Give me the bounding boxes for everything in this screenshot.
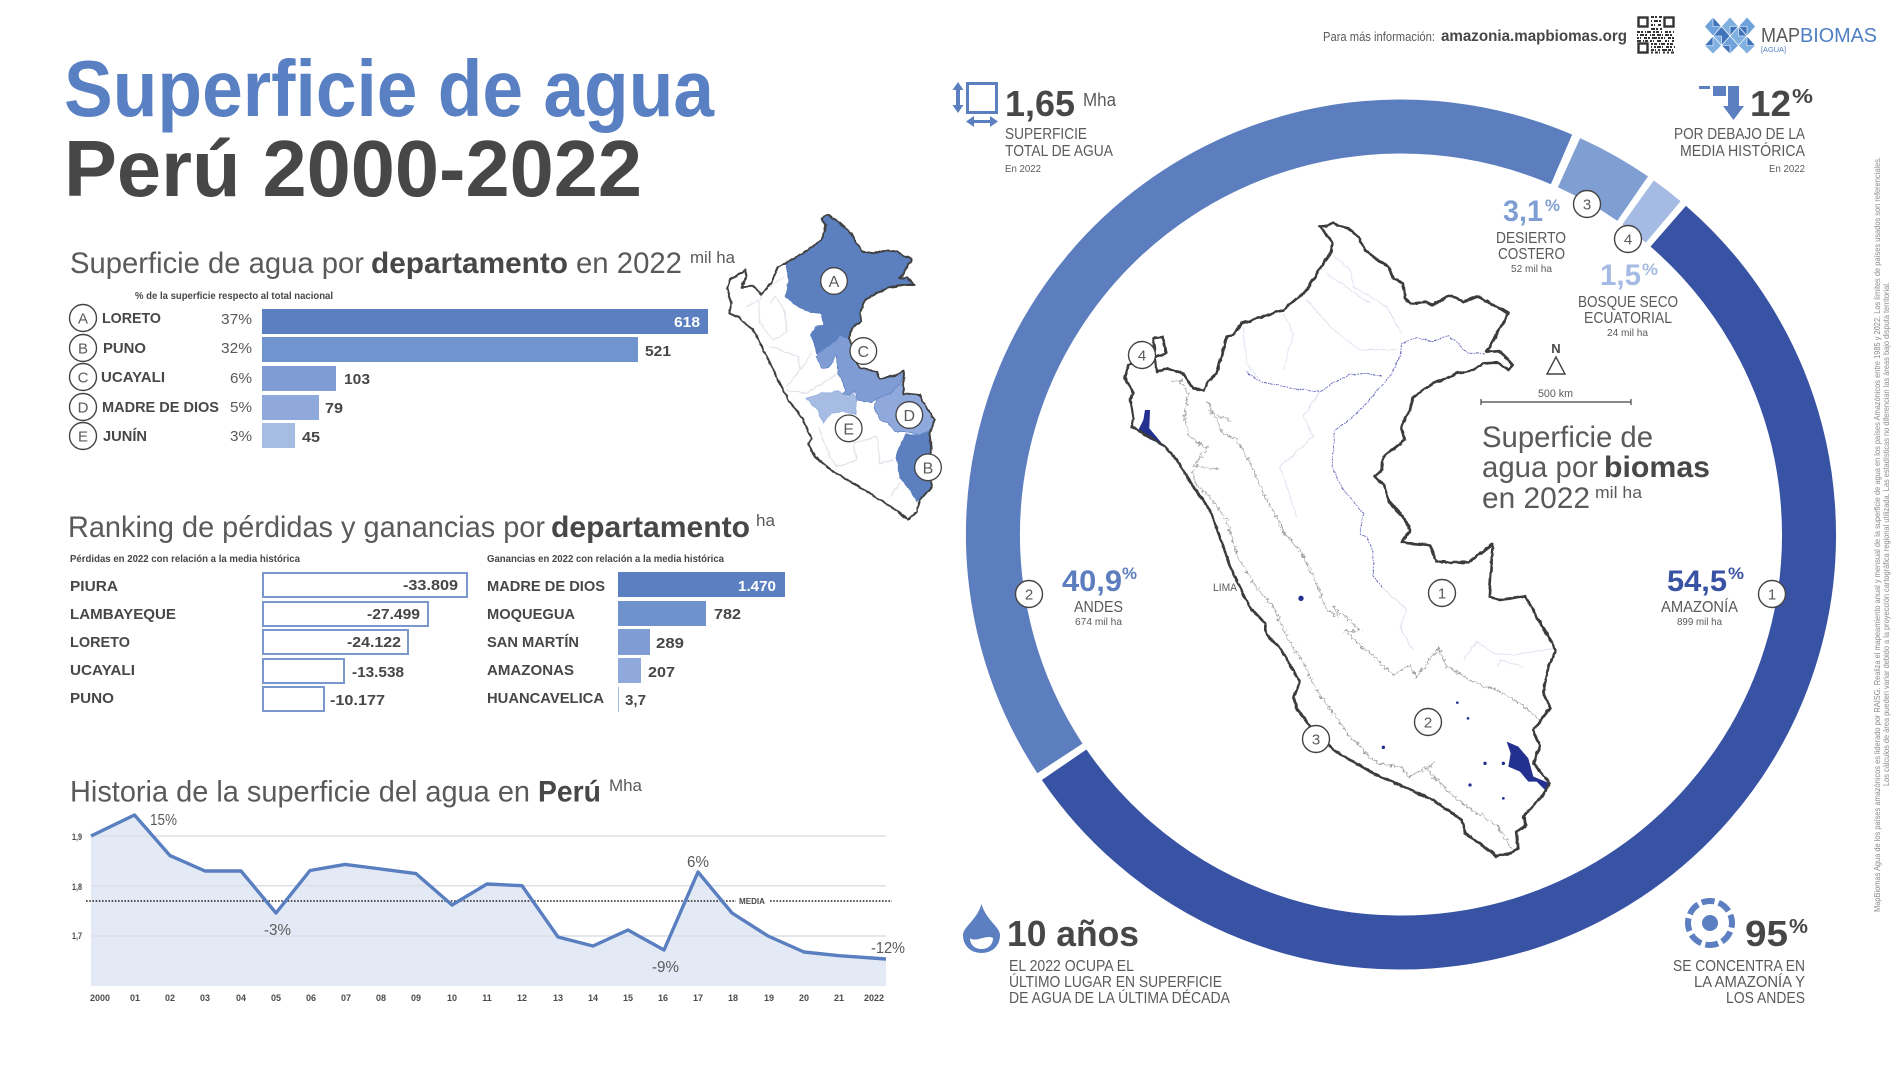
heading: historia: Historia de la superficie del agua en [70,776,530,808]
scale bar: 500 km [1538,388,1573,400]
map marker 3: 3 [1312,732,1320,748]
stat: Amazonía: 1 [1768,586,1776,604]
bars: pérdidas: -27.499 [367,606,420,623]
row: Madre de Dios: 79 [325,400,343,417]
area chart: 04 [236,993,246,1003]
stat: desierto costero: DESIERTO [1496,230,1566,247]
area chart: 06 [306,993,316,1003]
area chart: 07 [341,993,351,1003]
stat: 1,65 Mha: En 2022 [1005,163,1041,175]
bars: ganancias: MOQUEGUA [487,606,575,623]
map marker 3 [1302,726,1330,752]
stat: 95% [1673,894,1808,1007]
stat: 1,65 Mha: TOTAL DE AGUA [1005,143,1113,160]
bars: ganancias: 3,7 [625,692,646,709]
faint rivers [1243,255,1555,667]
stat: 1,65 Mha: Mha [1083,90,1117,110]
marker E: E [843,421,854,438]
stat: Andes: % [1122,564,1137,583]
row: Puno [70,334,671,362]
icon: flecha abajo [1699,86,1744,120]
bars: pérdidas: LORETO [70,634,130,651]
stat: bosque seco ecuatorial: ECUATORIAL [1584,310,1672,327]
logo: MapBiomas: [AGUA] [1761,47,1786,54]
stat: 1,65 Mha [952,82,1117,175]
bars: pérdidas [70,573,467,711]
stat: Andes: ANDES [1074,599,1123,616]
stat: 95%: % [1789,916,1808,938]
area chart: 15% [150,812,177,829]
area chart: 1,8 [72,882,82,892]
map marker 1: 1 [1438,586,1446,602]
area chart: 14 [588,993,598,1003]
stat: Andes: 674 mil ha [1075,616,1122,628]
stat: desierto costero: COSTERO [1498,246,1565,263]
area chart: 1,9 [72,832,82,842]
area chart: 1,7 [72,931,82,941]
bars: pérdidas: -13.538 [352,664,404,681]
marker D: D [904,408,915,425]
marker A: A [829,274,840,291]
bars: ganancias: 289 [656,635,684,652]
bars: ganancias: SAN MARTÍN [487,634,579,651]
area chart: -3% [264,922,291,939]
row: Ucayali: UCAYALI [101,369,165,386]
header: más información: Para más información: [1323,29,1435,44]
row: Madre de Dios: 5% [230,399,252,416]
stat: 95%: 95 [1745,913,1788,954]
heading: departamento: departamento [371,247,568,280]
bars: pérdidas: -24.122 [347,634,401,651]
stat: Andes: 2 [1025,586,1033,604]
area chart: 18 [728,993,738,1003]
area chart: 12 [517,993,527,1003]
row: Puno: 32% [221,340,252,357]
bars: ganancias: HUANCAVELICA [487,690,604,707]
stat: 12%: MEDIA HISTÓRICA [1680,141,1805,160]
map marker 2 [1414,708,1442,736]
area chart: 6% [687,854,709,871]
marker B [915,454,941,481]
vertical credits note [1873,157,1891,912]
biome boundaries [1172,380,1540,848]
marker B: B [923,460,933,477]
marker C [850,338,877,364]
area chart: 10 [447,993,457,1003]
area chart: MEDIA [739,897,765,906]
subheading: pérdidas: Pérdidas en 2022 con relación a la media histórica [70,553,300,565]
map marker 4 [1128,342,1156,368]
heading: ranking: ha [756,511,776,530]
area chart [72,812,905,1003]
area chart: 21 [834,993,844,1003]
stat: 95%: SE CONCENTRA EN [1673,958,1805,975]
country outline [1125,223,1556,856]
map: Perú biomas y agua [1125,223,1556,856]
map marker 1 [1428,580,1456,606]
row: Junín: 3% [230,428,252,445]
stat: Amazonía [1661,564,1786,628]
row: Ucayali: C [78,370,89,386]
bars: pérdidas: -33.809 [403,577,458,594]
vertical credits note: MapBiomas Agua de los países amazónicos es liderado por RAISG. Realiza el mapeamiento anual y mensual de la superficie de agua en los países Amazónicos entre 1985 y 2022. Los límites de países usados son referenciales. [1873,157,1882,912]
map marker 2: 2 [1424,714,1432,732]
stat: 12%: 12 [1750,83,1791,124]
logo: MapBiomas: MAP [1761,25,1800,47]
donut chart: biomas [825,0,1900,1067]
row: Loreto: A [78,310,88,328]
row: Madre de Dios: MADRE DE DIOS [102,399,219,416]
icon: superficie [952,82,998,127]
heading: ranking: Ranking de pérdidas y ganancias por [68,511,545,544]
area chart: 17 [693,993,703,1003]
stat: 10 años [963,904,1230,1007]
row: Madre de Dios [70,394,343,420]
main rivers [1247,335,1485,588]
area chart: 2022 [864,993,884,1003]
panel: superficie por departamento [70,247,736,450]
logo mosaic [1704,17,1756,54]
stat: bosque seco ecuatorial: % [1642,260,1658,279]
icon: water drop [963,904,1000,953]
title: Perú 2000-2022 [64,124,642,213]
stat: 1,65 Mha: 1,65 [1005,83,1075,124]
stat: bosque seco ecuatorial: 4 [1624,232,1632,248]
title [64,44,714,213]
row: Junín: E [78,428,88,446]
stat: bosque seco ecuatorial: 1,5 [1600,259,1641,292]
area chart: 13 [553,993,563,1003]
area chart: 2000 [90,993,110,1003]
stat: 10 años: EL 2022 OCUPA EL [1009,958,1134,975]
logo: MapBiomas: BIOMAS [1800,25,1877,47]
stat: bosque seco ecuatorial [1578,226,1678,339]
row: Puno: B [78,340,88,358]
heading: historia: Perú [538,776,601,808]
panel: historia [70,776,905,1003]
vertical credits note: Los cálculos de área pueden variar debido a la proyección cartográfica regional utilizada. Las estadísticas no diferencian las áreas bajo disputa territorial. [1882,282,1891,786]
heading: biomas: biomas [1604,451,1710,484]
row: Junín [70,422,320,450]
bars: pérdidas: PIURA [70,578,118,595]
stat: 10 años: 10 años [1007,913,1139,954]
scale bar [1481,388,1631,405]
stat: 12%: En 2022 [1769,163,1805,175]
heading: biomas: agua por [1482,451,1598,484]
row: Madre de Dios: D [78,400,89,416]
area chart: 15 [623,993,633,1003]
map marker 4: 4 [1138,348,1146,364]
heading: departamento [70,247,736,280]
bars: pérdidas: UCAYALI [70,662,135,679]
water bodies [1138,410,1505,800]
stat: 12%: POR DEBAJO DE LA [1674,126,1805,143]
department shapes [727,215,935,519]
header: más información: amazonia.mapbiomas.org [1441,28,1627,45]
area chart: -12% [871,940,905,957]
stat: 10 años: ÚLTIMO LUGAR EN SUPERFICIE [1009,972,1222,991]
area chart: 11 [482,993,492,1003]
row: Puno: PUNO [103,340,146,357]
stat: 12% [1674,83,1813,175]
logo: MapBiomas [1704,17,1877,54]
bars: ganancias [487,572,785,712]
bars: ganancias: 1.470 [738,578,776,595]
stat: bosque seco ecuatorial: BOSQUE SECO [1578,294,1678,311]
row: Loreto: LORETO [102,310,161,327]
stat: bosque seco ecuatorial: 24 mil ha [1607,327,1648,339]
stat: 95%: LOS ANDES [1726,990,1805,1007]
subheading: ganancias: Ganancias en 2022 con relación a la media histórica [487,553,724,565]
bars: ganancias: MADRE DE DIOS [487,578,605,595]
bars: ganancias: 207 [648,664,675,681]
label: Lima: LIMA [1213,582,1238,594]
area chart: 09 [411,993,421,1003]
heading: departamento: Superficie de agua por [70,247,364,280]
area chart: 03 [200,993,210,1003]
icon: QR code [1637,17,1675,52]
icon: anillo [1681,894,1739,952]
lago Titicaca [1507,742,1550,790]
heading: biomas [1482,421,1710,515]
bars: ganancias: 782 [714,606,741,623]
row: Junín: 45 [302,429,320,446]
stat: 95%: LA AMAZONÍA Y [1694,972,1805,991]
north arrow: N [1551,341,1561,356]
chart note: % de la superficie respecto al total nacional [135,291,333,302]
area chart: 20 [799,993,809,1003]
heading: biomas: Superficie de [1482,421,1653,454]
title: Superficie de agua [64,44,714,133]
small map: departamentos de Perú [727,215,941,519]
stat: Andes: 40,9 [1062,565,1122,598]
area chart: 01 [130,993,140,1003]
stat: Andes [1016,564,1137,628]
stat: desierto costero: 3 [1583,196,1591,214]
area chart: 08 [376,993,386,1003]
bars: pérdidas: PUNO [70,690,114,707]
row: Loreto: 37% [221,311,252,328]
north arrow [1547,341,1565,374]
area chart: 02 [165,993,175,1003]
bars: pérdidas: LAMBAYEQUE [70,606,176,623]
header: más información [1323,28,1627,45]
row: Ucayali: 103 [344,371,370,388]
row: Ucayali [70,364,370,391]
marker A [821,268,847,294]
stat: desierto costero: 52 mil ha [1511,263,1552,275]
heading: departamento: mil ha [690,248,736,267]
bars: ganancias: AMAZONAS [487,662,574,679]
heading: historia: Mha [609,776,643,795]
stat: Amazonía: 54,5 [1667,565,1727,598]
stat: 12%: % [1792,86,1813,108]
panel: ranking [68,511,785,712]
area chart: 05 [271,993,281,1003]
row: Ucayali: 6% [230,370,252,387]
stat: desierto costero [1496,190,1600,275]
stat: desierto costero: 3,1 [1503,195,1543,228]
row: Loreto [70,304,708,334]
area chart: -9% [652,959,679,976]
stat: Amazonía: 899 mil ha [1677,616,1722,628]
row: Puno: 521 [645,343,671,360]
stat: 1,65 Mha: SUPERFICIE [1005,126,1087,143]
row: Loreto: 618 [674,314,700,331]
stat: Amazonía: % [1728,564,1744,583]
stat: Amazonía: AMAZONÍA [1661,597,1738,616]
heading: biomas: mil ha [1595,483,1643,502]
marker C: C [858,344,869,361]
heading: ranking: departamento [551,511,750,544]
heading: biomas: en 2022 [1482,482,1590,515]
heading: departamento: en 2022 [576,247,682,280]
marker E [835,415,862,442]
row: Junín: JUNÍN [103,428,147,445]
area chart: 16 [658,993,668,1003]
area chart: 19 [764,993,774,1003]
stat: desierto costero: % [1545,196,1560,215]
marker D [896,402,923,428]
stat: 10 años: DE AGUA DE LA ÚLTIMA DÉCADA [1009,988,1230,1007]
bars: pérdidas: -10.177 [330,692,385,709]
